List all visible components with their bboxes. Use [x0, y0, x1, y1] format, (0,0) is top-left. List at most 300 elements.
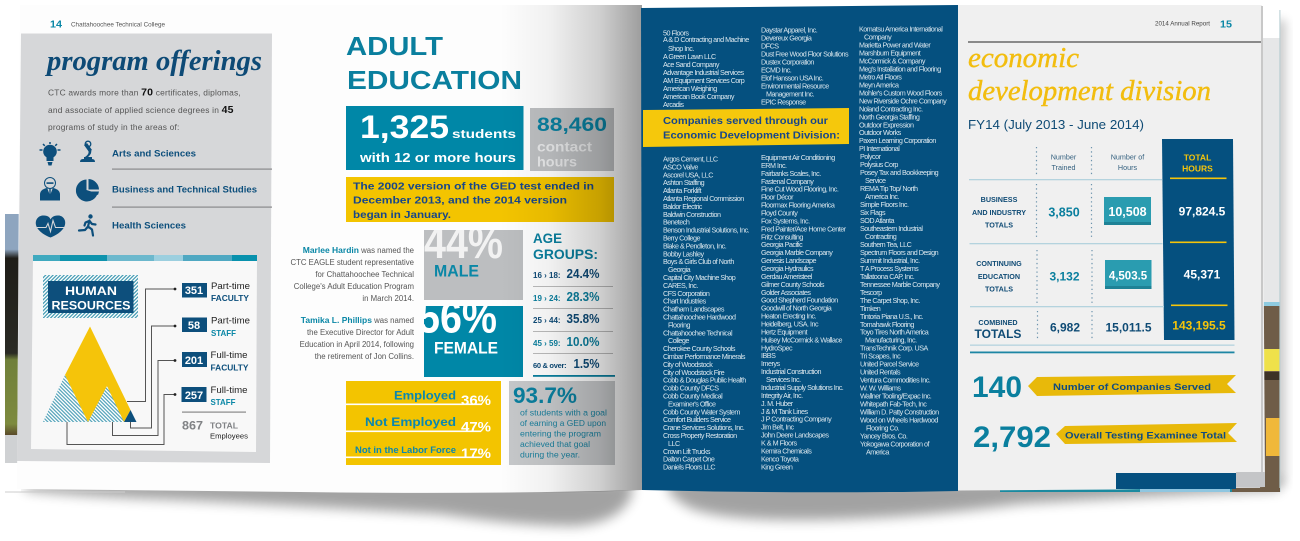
company list: column 3: Tescorp [860, 288, 882, 297]
company list: bottom column 1: Chattahoochee Hardwood [663, 312, 736, 322]
company list: column 3: SOD Atlanta [860, 216, 895, 225]
company list: bottom column 1: Daniels Floors LLC [663, 463, 715, 472]
company list: top column 1: A Green Lawn LLC [663, 52, 716, 61]
panel: companies served (navy page) [641, 5, 958, 492]
company list: top column 2: Devereux Georgia [761, 34, 812, 42]
company list: column 3: Ventura Commodities Inc. [860, 376, 931, 385]
icon: heart with pulse [36, 215, 65, 238]
stat: 2,792 testing examinees: Overall Testing Examinee Total [1065, 430, 1226, 442]
row: combined totals: COMBINED [978, 318, 1018, 327]
company list: bottom column 1: Cobb County Water System [663, 407, 740, 416]
callout: GED version note: December 2013, and the 2014 version [353, 196, 567, 206]
company list: column 3: Six Flags [860, 208, 886, 217]
company list: column 3: Tomahawk Flooring [860, 320, 914, 329]
row: business and industry: TOTALS [985, 220, 1013, 230]
company list: bottom column 1: Cobb County Medical [663, 391, 723, 400]
text block: staff announcements [290, 245, 415, 361]
company list: bottom column 1: Atlanta Regional Commission [663, 194, 744, 203]
age groups table: 19 › 24: [533, 294, 561, 303]
company list: column 3: Wallner Tooling/Expac Inc. [860, 392, 932, 401]
company list: bottom column 2: Kemira Chemicals [761, 446, 812, 455]
text block: staff announcements: the Executive Director for Adult [307, 328, 415, 337]
stat: 257 full-time staff: 257 [185, 390, 203, 402]
company list: bottom column 1: Georgia [668, 265, 691, 274]
company list: column 3: Polysius Corp [860, 160, 898, 169]
right page: economic development division [958, 5, 1265, 490]
company list: column 3: North Georgia Staffing [859, 112, 920, 121]
icon: light bulb [40, 142, 60, 166]
panel: program offerings [17, 34, 272, 463]
company list: bottom column 2: Fritz Consulting [761, 232, 803, 241]
age groups table: 25 › 44: [533, 316, 561, 325]
company list: bottom column 1: College [668, 336, 689, 345]
stat: 2,792 testing examinees: 2,792 [973, 421, 1051, 454]
company list: bottom column 2: Hertz Equipment [761, 327, 808, 336]
triangle chart [43, 326, 136, 422]
company list: bottom column 1: Crane Services Solutions, Inc. [663, 423, 745, 432]
company list: bottom column 2: Georgia Pacific [761, 240, 803, 249]
stat: 867 total employees [182, 412, 248, 440]
company list: bottom column 1: Boys & Girls Club of North [663, 257, 734, 266]
stat: 351 part-time faculty: FACULTY [211, 293, 249, 303]
company list: column 3: Tri Scapes, Inc [860, 352, 901, 361]
age groups table: 10.0% [566, 335, 600, 349]
company list: bottom column 2: Fairbanks Scales, Inc. [761, 169, 821, 178]
stat box: 88,460 contact hours: 88,460 [537, 115, 607, 136]
company list: column 3: PI International [859, 144, 900, 153]
company list: bottom column 2: Golder Associates [761, 288, 811, 297]
company list: column 3: Whitepath Fab-Tech, Inc [860, 400, 927, 409]
company list: column 3: The Carpet Shop, Inc. [860, 296, 920, 305]
heading: economic development division [968, 42, 1211, 107]
table: training hours: HOURS [1182, 164, 1213, 174]
company list: bottom column 1: Baldwin Construction [663, 210, 721, 219]
heading: adult education: ADULT [346, 33, 443, 61]
company list: column 3: New Riverside Ochre Company [859, 96, 947, 105]
company list: top column 2: Environmental Resource [761, 82, 829, 90]
company list: top column 1: AM Equipment Services Corp [663, 76, 745, 85]
stat: 58 part-time staff: 58 [188, 320, 200, 332]
company list: top column 2: Dustex Corporation [761, 58, 814, 66]
company list: top column 2: Daystar Apparel, Inc. [761, 26, 818, 34]
company list: top column 1: Advantage Industrial Services [663, 68, 744, 77]
stat box: 56% female [424, 306, 523, 377]
row: combined totals: 143,195.5 [1172, 318, 1226, 332]
left page [17, 5, 642, 494]
stat: 257 full-time staff: Full-time [210, 385, 248, 396]
company list: column 3: Posey Tax and Bookkeeping [860, 168, 939, 177]
company list: bottom column 1: Comfort Builders Service [663, 415, 731, 424]
company list: column 3: America [866, 447, 889, 456]
company list: column 3: Contracting [865, 232, 897, 241]
company list: bottom column 2: Floormax Flooring America [761, 201, 835, 210]
stat box: 93.7% goal achieved: entering the program [520, 430, 601, 438]
company list: column 3: America Inc. [865, 192, 899, 201]
company list: top column 1: A & D Contracting and Machine [663, 35, 749, 44]
company list: column 3: Summit Industrial, Inc. [860, 256, 920, 265]
company list: bottom column 2: Floor Décor [761, 193, 794, 202]
company list: column 3: Marshburn Equipment [859, 48, 921, 57]
column headers: Number [1051, 152, 1077, 162]
company list: top column 1: Shop Inc. [668, 44, 694, 53]
row: continuing education: 3,132 [1049, 270, 1080, 284]
page header: 2014 Annual Report [1155, 20, 1210, 28]
row: continuing education: CONTINUING [976, 259, 1022, 268]
stat box: 93.7% goal achieved: of students with a goal [520, 408, 607, 418]
stat: 140 companies served: 140 [972, 371, 1022, 404]
company list: top column 1: Ace Sand Company [663, 60, 720, 69]
page header [968, 20, 1261, 43]
stat box: 93.7% goal achieved: of earning a GED upon [520, 419, 606, 428]
company list: bottom column 2: Good Shepherd Foundation [761, 296, 838, 305]
stat: 257 full-time staff: STAFF [210, 397, 236, 407]
column headers: Hours [1118, 163, 1137, 172]
company list: bottom column 1: Flooring [668, 320, 690, 329]
company list: bottom column 1: Bobby Lashley [663, 249, 705, 258]
company list: column 3: Wood on Wheels Hardwood [860, 416, 938, 425]
page number and college name: Chattahoochee Technical College [71, 22, 165, 28]
program label: Business and Technical Studies: Business and Technical Studies [112, 184, 257, 194]
row: business and industry: AND INDUSTRY [972, 208, 1026, 217]
program label: Health Sciences: Health Sciences [112, 220, 186, 230]
text block: staff announcements: Marlee Hardin was named the [303, 245, 414, 255]
company list: bottom column 1: Chattahoochee Technical [663, 328, 733, 337]
stat box: 1,325 students [346, 106, 524, 170]
company list: bottom column 1: City of Woodstock [663, 360, 713, 369]
stat box: 1,325 students: students [452, 127, 516, 141]
text block: staff announcements: in March 2014. [362, 294, 414, 303]
row: continuing education: 4,503.5 [1109, 270, 1148, 282]
company list: bottom column 2: J. M. Huber [761, 399, 794, 408]
stat box: 56% female: FEMALE [434, 340, 498, 358]
connector lines [67, 288, 176, 444]
stat: 201 full-time faculty: 201 [185, 355, 203, 367]
row: continuing education: 45,371 [1184, 268, 1221, 282]
company list: column 3: William D. Patty Construction [860, 408, 939, 417]
company list: bottom column 1: Chart Industries [663, 297, 707, 306]
employment status panel: 36% [461, 392, 492, 408]
company list: bottom column 1: Cobb & Douglas Public Health [663, 376, 746, 385]
company list: bottom column 1: CARES, Inc. [663, 281, 698, 290]
company list: bottom column 2: Equipment Air Conditioning [761, 153, 835, 162]
company list: top column 2: ECMD Inc. [761, 66, 792, 74]
age groups table: 35.8% [566, 312, 600, 326]
stat box: 88,460 contact hours: hours [537, 154, 577, 170]
company list: bottom column 1: Dalton Carpet One [663, 455, 715, 464]
row: combined totals: 15,011.5 [1105, 320, 1152, 334]
stat box: 44% male: MALE [434, 262, 479, 280]
row: combined totals [975, 318, 1226, 341]
stat: 867 total employees: TOTAL [210, 422, 238, 430]
company list: column 3: Meyn America [859, 80, 899, 89]
stat: 58 part-time staff: Part-time [211, 316, 250, 326]
row: business and industry: 97,824.5 [1179, 204, 1226, 218]
company list: column 3: TransTechnik Corp. USA [860, 344, 929, 353]
company list: bottom column 2: Georgia Marble Company [761, 248, 833, 257]
text block: staff announcements: for Chattahoochee Technical [315, 270, 414, 279]
company list: column 3: United Parcel Service [860, 360, 919, 369]
company list: top column 1: Arcadis [663, 100, 684, 109]
employment status panel: Not Employed [365, 417, 456, 429]
company list: bottom column 2: Industrial Supply Solutions Inc. [761, 383, 844, 392]
stat: 867 total employees: 867 [182, 418, 203, 432]
company list: column 3: Meg's Installation and Flooring [859, 64, 941, 73]
back page layer left with photo [5, 214, 125, 492]
intro paragraph: and associate of applied science degrees in [48, 105, 222, 115]
stat: 140 companies served [972, 371, 1236, 404]
company list: bottom column 1: Chatham Landscapes [663, 305, 725, 314]
company list: bottom column 2: Industrial Construction [761, 367, 822, 376]
company list: bottom column 1: LLC [668, 439, 680, 448]
program label: Arts and Sciences: Arts and Sciences [112, 148, 196, 158]
company list: bottom column 1: Examiner's Office [668, 399, 716, 408]
age groups table: AGE [533, 230, 562, 246]
icon: microscope [80, 141, 95, 162]
text block: staff announcements: Education in April 2014, following [300, 340, 414, 349]
icon: business person [40, 178, 60, 200]
company list: bottom column 2: Kenco Toyota [761, 454, 799, 463]
text block: staff announcements: College's Adult Education Program [294, 282, 414, 291]
company list: bottom column 2: Imerys [761, 359, 780, 368]
stat: 201 full-time faculty [182, 350, 249, 372]
stat box: 93.7% goal achieved [509, 381, 615, 465]
stat box: 1,325 students: 1,325 [360, 109, 449, 145]
table: training hours [969, 139, 1234, 353]
company list: column 3: Metro Atl Floors [859, 72, 902, 81]
company list: column 3: Polycor [860, 152, 882, 161]
company list: bottom column 1: Capital City Machine Shop [663, 273, 736, 282]
company list: column 3: Tallatoona CAP, Inc. [860, 272, 915, 281]
company list: column 3: McCormick & Company [859, 56, 926, 65]
text block: staff announcements: the retirement of Jon Collins. [315, 352, 414, 361]
row: continuing education: TOTALS [985, 284, 1013, 294]
page number and college name: 14 [50, 20, 62, 30]
stat box: 56% female: 56% [418, 292, 497, 342]
company list: top column 1: 50 Floors [663, 28, 689, 38]
company list: bottom column 2: Hulsey McCormick & Wallace [761, 335, 842, 344]
company list: column 3: Noland Contracting Inc. [859, 104, 923, 113]
company list: column 3: United Rentals [860, 368, 901, 377]
company list: top column 1: American Weighing [663, 84, 717, 93]
company list: column 3: Marietta Power and Water [859, 40, 931, 49]
stat box: 88,460 contact hours: contact [537, 138, 592, 154]
company list: column 3: Southern Tea, LLC [860, 240, 912, 249]
icon: pie chart [76, 179, 99, 201]
stat: 351 part-time faculty [182, 281, 250, 303]
company list: bottom column 1: Benetech [663, 218, 690, 227]
company list: top column 2: DFCS [761, 42, 779, 50]
company list: bottom column 2: HydroSpec [761, 343, 793, 352]
age groups table: 24.4% [566, 267, 600, 281]
callout: GED version note: The 2002 version of the GED test ended in [353, 182, 594, 192]
stat box: 44% male: 44% [424, 217, 503, 268]
company list: top column 1: American Book Company [663, 92, 735, 101]
company list: bottom column 2: Services Inc. [766, 375, 801, 384]
employment status panel: Not in the Labor Force [355, 445, 456, 455]
company list: bottom column 2: John Deere Landscapes [761, 431, 829, 440]
company list: column 3: Flooring Co. [866, 424, 900, 433]
icon: runner [79, 214, 96, 236]
company list: bottom column 1: ASCO Valve [663, 162, 698, 171]
age groups table: 1.5% [574, 357, 600, 371]
company list: bottom column 2: Jim Belt, Inc [761, 423, 795, 432]
banner: companies served heading [643, 108, 849, 147]
banner: companies served heading: Companies served through our [663, 115, 828, 127]
company list: top column 2: Management Inc. [766, 90, 815, 98]
company list: top column 2: Elof Hansson USA Inc. [761, 74, 824, 82]
company list: column 3: Tintoria Piana U.S., Inc. [860, 312, 924, 321]
company list: bottom column 1: Berry College [663, 234, 701, 242]
heading: program offerings: program offerings [45, 46, 262, 77]
stat: 201 full-time faculty: Full-time [210, 350, 248, 361]
intro paragraph: 45 [222, 104, 234, 116]
row: combined totals: TOTALS [975, 327, 1021, 341]
stat box: 88,460 contact hours [530, 108, 614, 171]
company list: bottom column 2: Floyd County [761, 209, 798, 218]
age groups table: 60 & over: [533, 361, 566, 370]
stat box: 93.7% goal achieved: 93.7% [513, 383, 577, 408]
heading: human resources: RESOURCES [52, 298, 130, 312]
stat: 351 part-time faculty: Part-time [211, 281, 250, 292]
company list: bottom column 1: CFS Corporation [663, 289, 710, 298]
intro paragraph: 70 certificates, diplomas, [141, 86, 241, 98]
stat: 257 full-time staff [182, 385, 248, 407]
row: business and industry: 10,508 [1108, 205, 1147, 219]
company list: bottom column 2: K & M Floors [761, 438, 797, 447]
company list: bottom column 2: Georgia Hydraulics [761, 264, 814, 273]
row: business and industry: BUSINESS [981, 195, 1018, 204]
stat: 140 companies served: Number of Companies Served [1053, 382, 1211, 393]
age groups table: 16 › 18: [533, 271, 561, 280]
stat: 867 total employees: Employees [210, 432, 248, 440]
company list: column 3: Outdoor Expression [859, 120, 914, 129]
row: business and industry: 3,850 [1048, 206, 1080, 220]
company list: bottom column 1: Cimbar Performance Minerals [663, 352, 746, 361]
company list: bottom column 1: Blake & Pendleton, Inc. [663, 241, 727, 250]
company list: column 3: T A Process Systems [860, 264, 919, 273]
page header: 15 [1220, 20, 1232, 30]
age groups table: 28.3% [566, 290, 600, 304]
company list: bottom column 1: Benson Industrial Solutions, Inc. [663, 226, 750, 235]
company list: bottom column 2: Gerdau Ameristeel [761, 272, 813, 281]
row: continuing education: EDUCATION [978, 272, 1020, 281]
heading: adult education [346, 33, 522, 95]
company list: bottom column 2: Gilmer County Schools [761, 280, 825, 289]
company list: bottom column 1: Baldor Electric [663, 202, 703, 211]
company list: bottom column 2: King Green [761, 462, 793, 471]
heading: human resources [43, 275, 138, 318]
company list: column 3: Paxen Learning Corporation [859, 136, 936, 145]
company list: bottom column 2: Integrity Air, Inc. [761, 391, 803, 400]
colour strip [33, 255, 257, 261]
stat box: 1,325 students: with 12 or more hours [359, 150, 516, 165]
heading: adult education: EDUCATION [347, 67, 522, 95]
page number and college name [50, 20, 165, 30]
intro paragraph: CTC awards more than [48, 88, 141, 98]
table: training hours: TOTAL [1184, 152, 1211, 162]
company list: bottom column 2: J P Contracting Company [761, 415, 832, 424]
stat: 201 full-time faculty: FACULTY [210, 362, 249, 372]
employment status panel: Employed [394, 390, 456, 402]
company list: column 3: Yancey Bros. Co. [860, 431, 908, 440]
stat: 58 part-time staff [182, 316, 250, 338]
company list: bottom column 1: Cobb County DFCS [663, 384, 719, 393]
text block: staff announcements: CTC EAGLE student representative [290, 258, 414, 267]
employment status panel [346, 381, 501, 465]
employment status panel: 47% [461, 418, 492, 434]
company list: bottom column 1: Ashton Staffing [663, 178, 705, 187]
company list: bottom column 2: Fine Cut Wood Flooring, Inc. [761, 185, 839, 194]
company list: column 3: Spectrum Floors and Design [860, 248, 939, 257]
company list: column 3: Outdoor Works [859, 128, 902, 137]
company list: bottom column 2: Heidelberg, USA. Inc [761, 320, 819, 329]
company list: bottom column 1: Argos Cement, LLC [663, 154, 718, 164]
heading: human resources: HUMAN [65, 284, 117, 298]
row: business and industry [972, 195, 1226, 230]
company list: column 3: Tennessee Marble Company [860, 280, 940, 289]
stat: 2,792 testing examinees [973, 421, 1237, 454]
company list: bottom column 2: Goodwill of North Georgia [761, 304, 832, 313]
company list: bottom column 1: Ascorel USA, LLC [663, 170, 713, 179]
age groups table [533, 230, 615, 377]
company list: top column 2: EPIC Response [761, 98, 806, 106]
company list: bottom column 1: Crown Lift Trucks [663, 447, 711, 456]
stat box: 93.7% goal achieved: achieved that goal [520, 440, 590, 449]
company list: bottom column 2: J & M Tank Lines [761, 407, 809, 416]
subheading: fiscal year: FY14 (July 2013 - June 2014) [968, 118, 1144, 132]
company list: column 3: Timken [860, 304, 881, 313]
company list: column 3: Toyo Tires North America [860, 328, 929, 337]
company list: bottom column 2: Heaton Erecting Inc. [761, 312, 817, 321]
column headers: Number of [1111, 152, 1144, 162]
company list: column 3: Manufacturing, Inc. [865, 336, 917, 345]
row: combined totals: 6,982 [1050, 320, 1080, 334]
company list: bottom column 1: Cherokee County Schools [663, 344, 736, 353]
spine shading on left page [500, 5, 642, 494]
company list: column 3: W. W. Williams [860, 384, 901, 393]
company list: bottom column 1: Atlanta Forklift [663, 186, 701, 195]
company list: column 3: Service [865, 176, 886, 185]
intro paragraph: programs of study in the areas of: [48, 122, 180, 132]
company list: column 3: Komatsu America International [859, 24, 943, 34]
company list: bottom column 1: City of Woodstock Fire [663, 368, 725, 377]
stat box: 44% male [424, 230, 523, 300]
column headers: Trained [1051, 163, 1076, 172]
banner: companies served heading: Economic Development Division: [663, 130, 840, 142]
company list: bottom column 2: Fox Systems, Inc. [761, 216, 810, 225]
age groups table: 45 › 59: [533, 339, 561, 348]
column headers [1051, 152, 1144, 172]
company list: top column 2: Dust Free Wood Floor Solutions [761, 50, 849, 58]
page tab at bottom [1116, 472, 1265, 489]
company list: column 3: Company [864, 32, 892, 41]
stat box: 93.7% goal achieved: during the year. [520, 450, 580, 460]
company list: column 3: Yokogawa Corporation of [860, 439, 929, 448]
stat: 58 part-time staff: STAFF [211, 328, 236, 338]
stat: 351 part-time faculty: 351 [185, 285, 203, 297]
company list: bottom column 2: ERM Inc. [761, 161, 787, 170]
callout: GED version note: began in January. [353, 210, 451, 221]
company list: bottom column 2: Fastenal Company [761, 177, 814, 186]
company list: bottom column 1: Cross Property Restoration [663, 431, 737, 440]
row: continuing education [976, 259, 1221, 294]
back page layer right with photo [1000, 10, 1280, 492]
employment status panel: 17% [461, 445, 492, 461]
text block: staff announcements: Tamika L. Phillips was named [301, 315, 414, 325]
company list: column 3: REMA Tip Top/ North [860, 184, 918, 193]
callout: GED version note [346, 177, 614, 222]
company list: column 3: Simple Floors Inc. [860, 200, 909, 209]
